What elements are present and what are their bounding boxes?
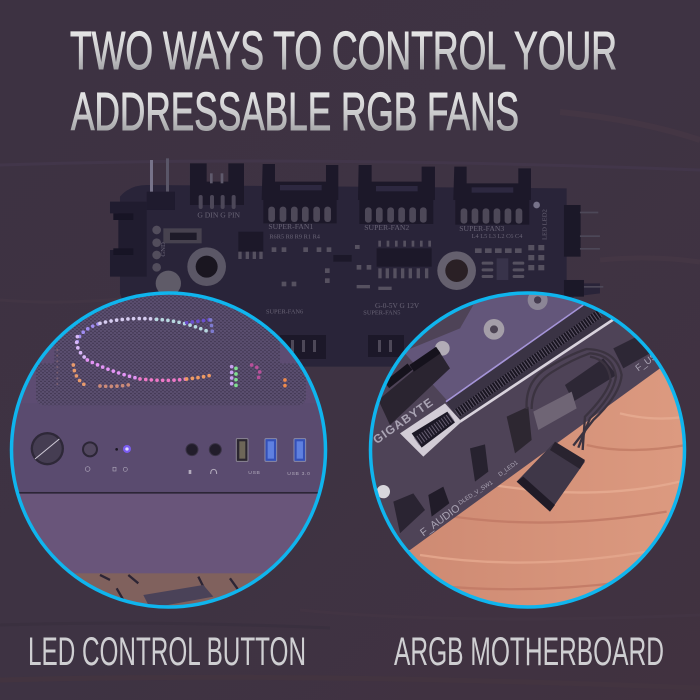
board silkscreen labels: GND xyxy=(160,242,167,257)
brand text: GIGABYTE xyxy=(370,395,436,447)
motherboard PCB xyxy=(372,304,660,550)
board silkscreen labels: R6R5 R8 R9 R1 R4 xyxy=(269,234,321,241)
power button xyxy=(82,441,98,471)
left power connector xyxy=(110,202,147,277)
board silkscreen labels: L4 L5 L3 L2 C6 C4 xyxy=(472,233,523,240)
board silkscreen labels: SUPER-FAN2 xyxy=(364,223,409,232)
right circle blue border xyxy=(370,293,684,607)
4-pin connector xyxy=(190,163,244,209)
bottom fan connectors of hub xyxy=(280,335,404,359)
metal top plate with traces xyxy=(406,294,582,400)
wood grain xyxy=(420,413,687,589)
port labels: USB xyxy=(248,470,261,476)
audio jacks xyxy=(186,444,221,456)
chips xyxy=(238,232,508,280)
board silkscreen labels: SUPER-FAN3 xyxy=(459,224,504,233)
port labels: USB 3.0 xyxy=(287,471,311,477)
board body xyxy=(120,185,600,367)
chip legs and solder pads xyxy=(238,241,544,290)
USB ports xyxy=(236,439,306,461)
dual PCIe slot xyxy=(400,305,615,457)
brand text: D_LED1 xyxy=(498,460,520,478)
status lights xyxy=(113,445,131,471)
super fan connector 1 xyxy=(262,164,338,223)
board silkscreen labels: G DIN G PIN xyxy=(197,210,241,219)
brand text: DLED_V_SW1 xyxy=(458,480,495,507)
RGB LED ring glowing through mesh xyxy=(57,319,285,387)
3-pin plug on header xyxy=(507,407,532,453)
cable xyxy=(527,349,622,450)
switch component xyxy=(163,228,202,243)
right header connectors xyxy=(564,205,603,297)
left circle blue border xyxy=(12,293,326,607)
brand text: F_USB xyxy=(634,348,664,373)
board silkscreen labels: SUPER-FAN6 xyxy=(266,308,303,315)
super fan connector 3 xyxy=(453,167,531,225)
board silkscreen labels: SUPER-FAN1 xyxy=(268,222,313,231)
header pins top left xyxy=(147,158,175,210)
screws xyxy=(435,290,548,356)
super fan connector 2 xyxy=(358,165,435,224)
board silkscreen labels: LED LED2 xyxy=(542,209,549,240)
jumpers and headers xyxy=(377,335,650,533)
board silkscreen labels: G-0-5V G 12V xyxy=(375,301,420,310)
board silkscreen labels xyxy=(160,209,549,317)
LED control knob xyxy=(31,432,64,465)
port labels xyxy=(188,468,310,475)
circle: ARGB motherboard with cable xyxy=(368,291,686,609)
board silkscreen labels: SUPER-FAN5 xyxy=(363,310,400,317)
small PCIe slots xyxy=(378,350,450,425)
wood and fan grille at bottom xyxy=(74,573,262,606)
mesh top panel xyxy=(36,287,306,405)
brand text xyxy=(370,348,664,539)
left connector pads xyxy=(152,226,161,272)
circle: LED control button on PC case xyxy=(10,291,328,609)
title xyxy=(70,21,617,142)
brand text: F_AUDIO xyxy=(418,502,462,539)
caption: LED control button: LED CONTROL BUTTON xyxy=(28,630,306,674)
mounting holes xyxy=(156,202,540,296)
circuit board: ARGB fan hub xyxy=(110,158,603,367)
case front panel xyxy=(19,492,318,573)
ARGB connector plug xyxy=(517,442,585,512)
